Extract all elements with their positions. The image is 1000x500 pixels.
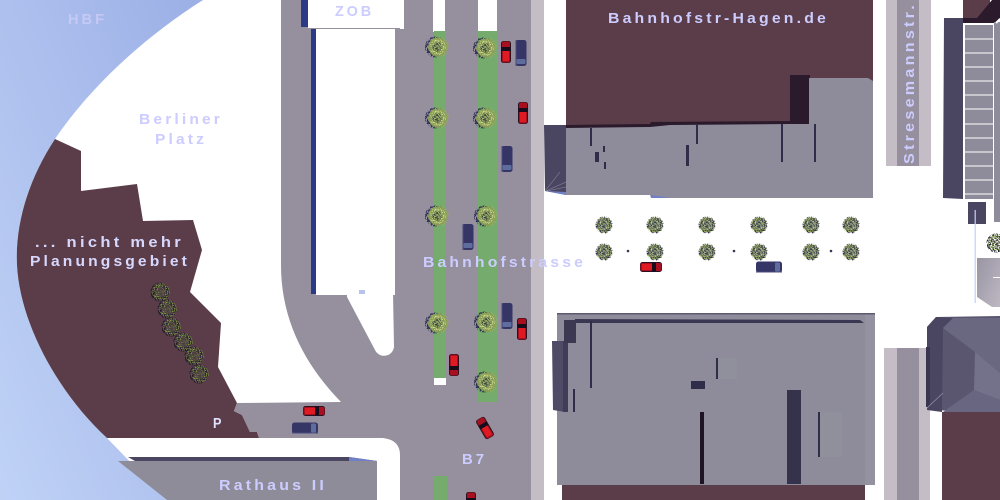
panel: hip-roof building bottom right — [926, 316, 1000, 500]
panel: small grey block far right — [977, 258, 1000, 307]
panel: green median strips — [434, 31, 498, 500]
panel: top building — [544, 75, 873, 198]
label: nicht mehr Planungsgebiet: Planungsgebiet — [30, 253, 190, 270]
panel: road network — [234, 0, 531, 500]
tree: far right bush — [986, 234, 1000, 252]
label: Berliner Platz — [139, 111, 223, 148]
label: nicht mehr Planungsgebiet — [30, 234, 190, 270]
trees: hedge on planning lot — [150, 282, 209, 384]
panel: bottom lot — [562, 485, 865, 500]
trees: boulevard rows — [425, 36, 498, 392]
panel: former planning area lot — [17, 139, 259, 438]
panel: right parking building — [943, 0, 1000, 303]
panel: building Rathaus II — [118, 457, 377, 500]
label: ZOB: ZOB — [335, 3, 374, 20]
cars — [292, 40, 782, 500]
panel: top lot — [566, 0, 873, 125]
trees: plaza — [596, 216, 860, 260]
label: Berliner Platz: Platz — [155, 131, 207, 148]
label: B7: B7 — [462, 451, 487, 468]
panel: bus station island — [301, 0, 497, 356]
label: Rathaus II: Rathaus II — [219, 477, 327, 494]
label: P parking: P — [213, 415, 224, 432]
label: Bahnhofstr-Hagen.de: Bahnhofstr-Hagen.de — [608, 10, 829, 27]
panel: Stresemannstr road — [886, 0, 931, 166]
label: HBF: HBF — [68, 11, 107, 28]
label: Bahnhofstrasse: Bahnhofstrasse — [423, 254, 586, 271]
label: Stresemannstr.: Stresemannstr. — [901, 2, 918, 164]
panel: lower side road — [884, 348, 930, 500]
label: nicht mehr Planungsgebiet: ... nicht mehr — [35, 234, 184, 251]
panel: sky-blue surround — [0, 0, 203, 500]
panel: bottom building — [552, 313, 875, 485]
label: Berliner Platz: Berliner — [139, 111, 223, 128]
panel: pavement strip — [531, 0, 544, 500]
